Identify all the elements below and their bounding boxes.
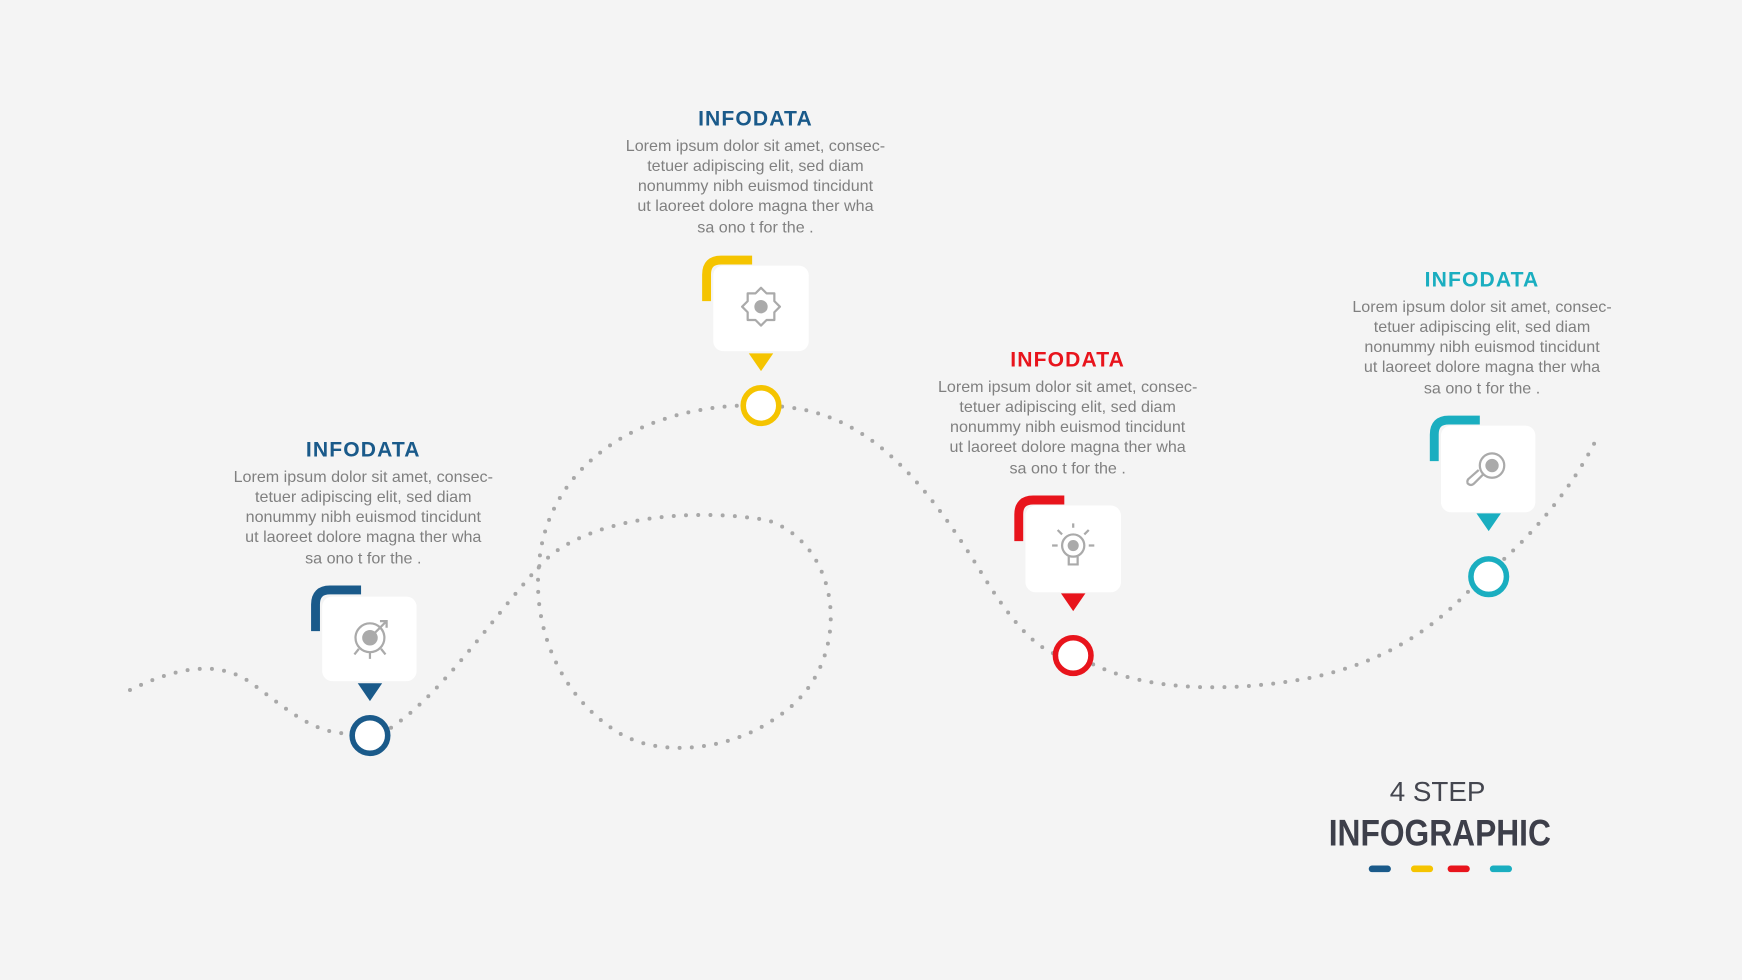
text block: step 2: nonummy nibh euismod tincidunt bbox=[638, 177, 874, 195]
text block: step 2: INFODATA bbox=[698, 108, 813, 131]
text block: step 3: tetuer adipiscing elit, sed diam bbox=[959, 398, 1176, 416]
text block: step 2: ut laoreet dolore magna ther wha bbox=[637, 197, 874, 215]
text block: step 3: Lorem ipsum dolor sit amet, consec- bbox=[938, 378, 1197, 396]
text block: step 3: ut laoreet dolore magna ther wha bbox=[950, 438, 1186, 456]
text block: step 2: sa ono t for the . bbox=[697, 218, 814, 236]
step 2 marker bbox=[707, 260, 809, 423]
text block: step 4 bbox=[1352, 269, 1612, 397]
text block: step 3: nonummy nibh euismod tincidunt bbox=[950, 418, 1186, 436]
text block: step 4: ut laoreet dolore magna ther wha bbox=[1364, 358, 1600, 376]
text block: step 1: ut laoreet dolore magna ther wha bbox=[245, 528, 481, 546]
text block: step 1 bbox=[234, 439, 493, 567]
text block: step 4: Lorem ipsum dolor sit amet, consec- bbox=[1352, 298, 1612, 316]
text block: step 1: tetuer adipiscing elit, sed diam bbox=[255, 488, 472, 506]
dotted path bbox=[130, 406, 1596, 748]
step 1 marker bbox=[316, 590, 417, 753]
text block: step 2: Lorem ipsum dolor sit amet, consec- bbox=[626, 137, 885, 155]
text block: step 2: tetuer adipiscing elit, sed diam bbox=[647, 157, 864, 175]
icon: target bbox=[354, 621, 387, 659]
step 3 marker bbox=[1019, 500, 1121, 673]
text block: step 1: nonummy nibh euismod tincidunt bbox=[246, 508, 481, 526]
text block: step 4: INFODATA bbox=[1425, 269, 1539, 292]
text block: step 3: sa ono t for the . bbox=[1009, 459, 1126, 477]
text block: step 1: Lorem ipsum dolor sit amet, consec- bbox=[234, 468, 493, 486]
icon: bulb bbox=[1052, 523, 1094, 564]
text block: step 2 bbox=[626, 108, 885, 236]
title block: 4 STEP bbox=[1390, 776, 1485, 807]
icon: magnifier bbox=[1467, 453, 1504, 485]
title block: INFOGRAPHIC bbox=[1329, 813, 1551, 854]
text block: step 1: INFODATA bbox=[306, 439, 421, 462]
text block: step 4: nonummy nibh euismod tincidunt bbox=[1364, 338, 1600, 356]
icon: gear bbox=[742, 288, 780, 326]
step 4 marker bbox=[1434, 420, 1535, 594]
text block: step 4: sa ono t for the . bbox=[1424, 379, 1540, 397]
text block: step 1: sa ono t for the . bbox=[305, 549, 421, 567]
text block: step 3 bbox=[938, 349, 1197, 477]
text block: step 4: tetuer adipiscing elit, sed diam bbox=[1374, 318, 1590, 336]
text block: step 3: INFODATA bbox=[1010, 349, 1125, 372]
title block bbox=[1329, 776, 1551, 872]
